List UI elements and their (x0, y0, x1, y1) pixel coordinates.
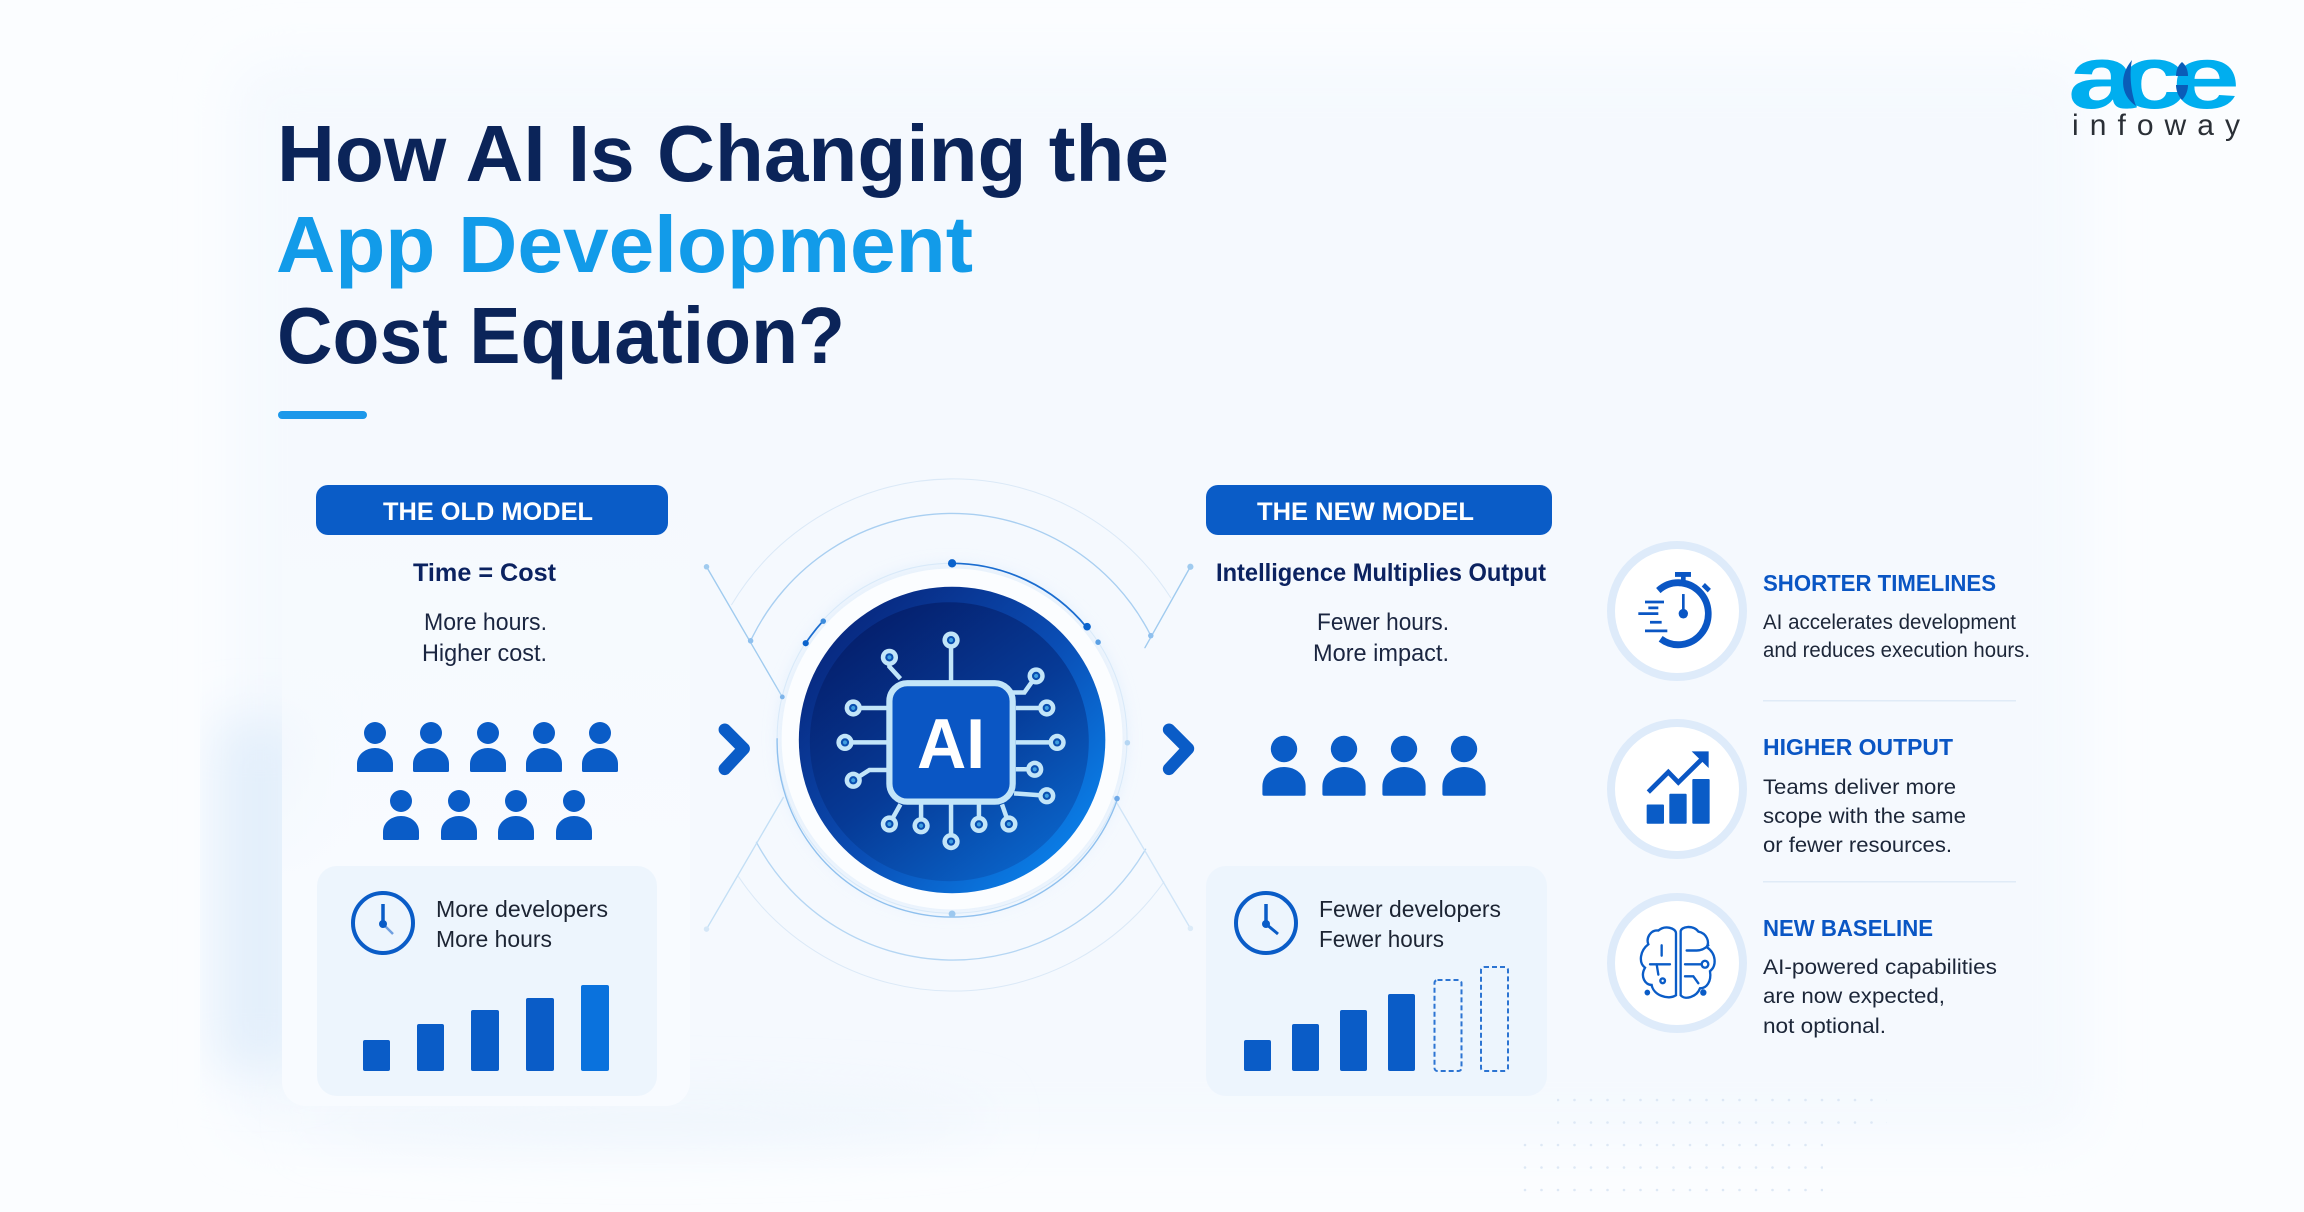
AI chip (889, 683, 1013, 802)
central AI graphic (704, 479, 1194, 991)
benefit: shorter timelines (1611, 545, 2030, 677)
bar chart: rising cost (363, 985, 609, 1071)
summary text: Fewer developers (1319, 896, 1501, 922)
title accent bar (278, 411, 367, 419)
icon: nine developers (357, 722, 618, 840)
heading: NEW BASELINE (1763, 915, 1933, 941)
old model summary box (317, 866, 657, 1096)
heading: SHORTER TIMELINES (1763, 570, 1996, 596)
new model description: Fewer hours. (1317, 609, 1449, 636)
benefit: new baseline (1611, 897, 1997, 1038)
old model description: Higher cost. (422, 640, 547, 667)
new model summary box (1206, 866, 1547, 1096)
body (1763, 775, 1966, 857)
arrow: old to AI (725, 730, 744, 769)
background wash (202, 692, 1887, 1192)
icon: AI brain (1611, 897, 1743, 1029)
old model header: THE OLD MODEL (383, 498, 593, 526)
AI label: AI (917, 705, 985, 784)
AI disc (799, 587, 1105, 893)
new model header (1206, 485, 1552, 535)
summary text: More hours (436, 926, 552, 952)
logo: ace infoway: ace (2068, 27, 2240, 127)
body: scope with the same (1763, 804, 1966, 828)
panel: old model (282, 478, 690, 1106)
icon: clock (1236, 893, 1296, 953)
new model header: THE NEW MODEL (1257, 498, 1474, 526)
body: and reduces execution hours. (1763, 638, 2030, 662)
new model subtitle: Intelligence Multiplies Output (1216, 559, 1547, 587)
body: not optional. (1763, 1014, 1886, 1038)
icon: stopwatch (1611, 545, 1743, 677)
panel: benefits (1611, 545, 2030, 1038)
circuit traces (845, 640, 1057, 842)
icon: clock (353, 893, 413, 953)
title: How AI Is Changing the (277, 109, 1169, 198)
new model description: More impact. (1313, 640, 1449, 667)
orbit arcs and connector lines (704, 479, 1194, 991)
old model description: More hours. (424, 609, 547, 636)
logo: ace infoway: infoway (2072, 109, 2240, 142)
circuit nodes (836, 632, 1066, 850)
body: Teams deliver more (1763, 775, 1956, 799)
title (276, 109, 1169, 380)
body: or fewer resources. (1763, 833, 1952, 857)
old model card background (282, 478, 690, 1106)
summary text (436, 896, 608, 952)
body: are now expected, (1763, 984, 1945, 1008)
body: AI-powered capabilities (1763, 955, 1997, 979)
heading: HIGHER OUTPUT (1763, 734, 1954, 760)
benefit: higher output (1611, 723, 1966, 857)
summary text: Fewer hours (1319, 926, 1444, 952)
summary text (1319, 896, 1501, 952)
body: AI accelerates development (1763, 610, 2016, 634)
body (1763, 955, 1997, 1038)
summary text: More developers (436, 896, 608, 922)
title: App Development (276, 200, 973, 289)
old model subtitle: Time = Cost (413, 559, 557, 587)
icon: four developers (1262, 736, 1486, 796)
body (1763, 610, 2030, 662)
bar chart: reduced cost with projected bars (1244, 967, 1508, 1071)
old model header (316, 485, 668, 535)
old model description (422, 609, 547, 667)
title: Cost Equation? (277, 291, 845, 380)
panel: new model (1206, 485, 1552, 1096)
glow and ring (777, 559, 1130, 917)
icon: growth chart (1611, 723, 1743, 855)
arrow: AI to new (1169, 730, 1188, 769)
new model description (1313, 609, 1449, 667)
